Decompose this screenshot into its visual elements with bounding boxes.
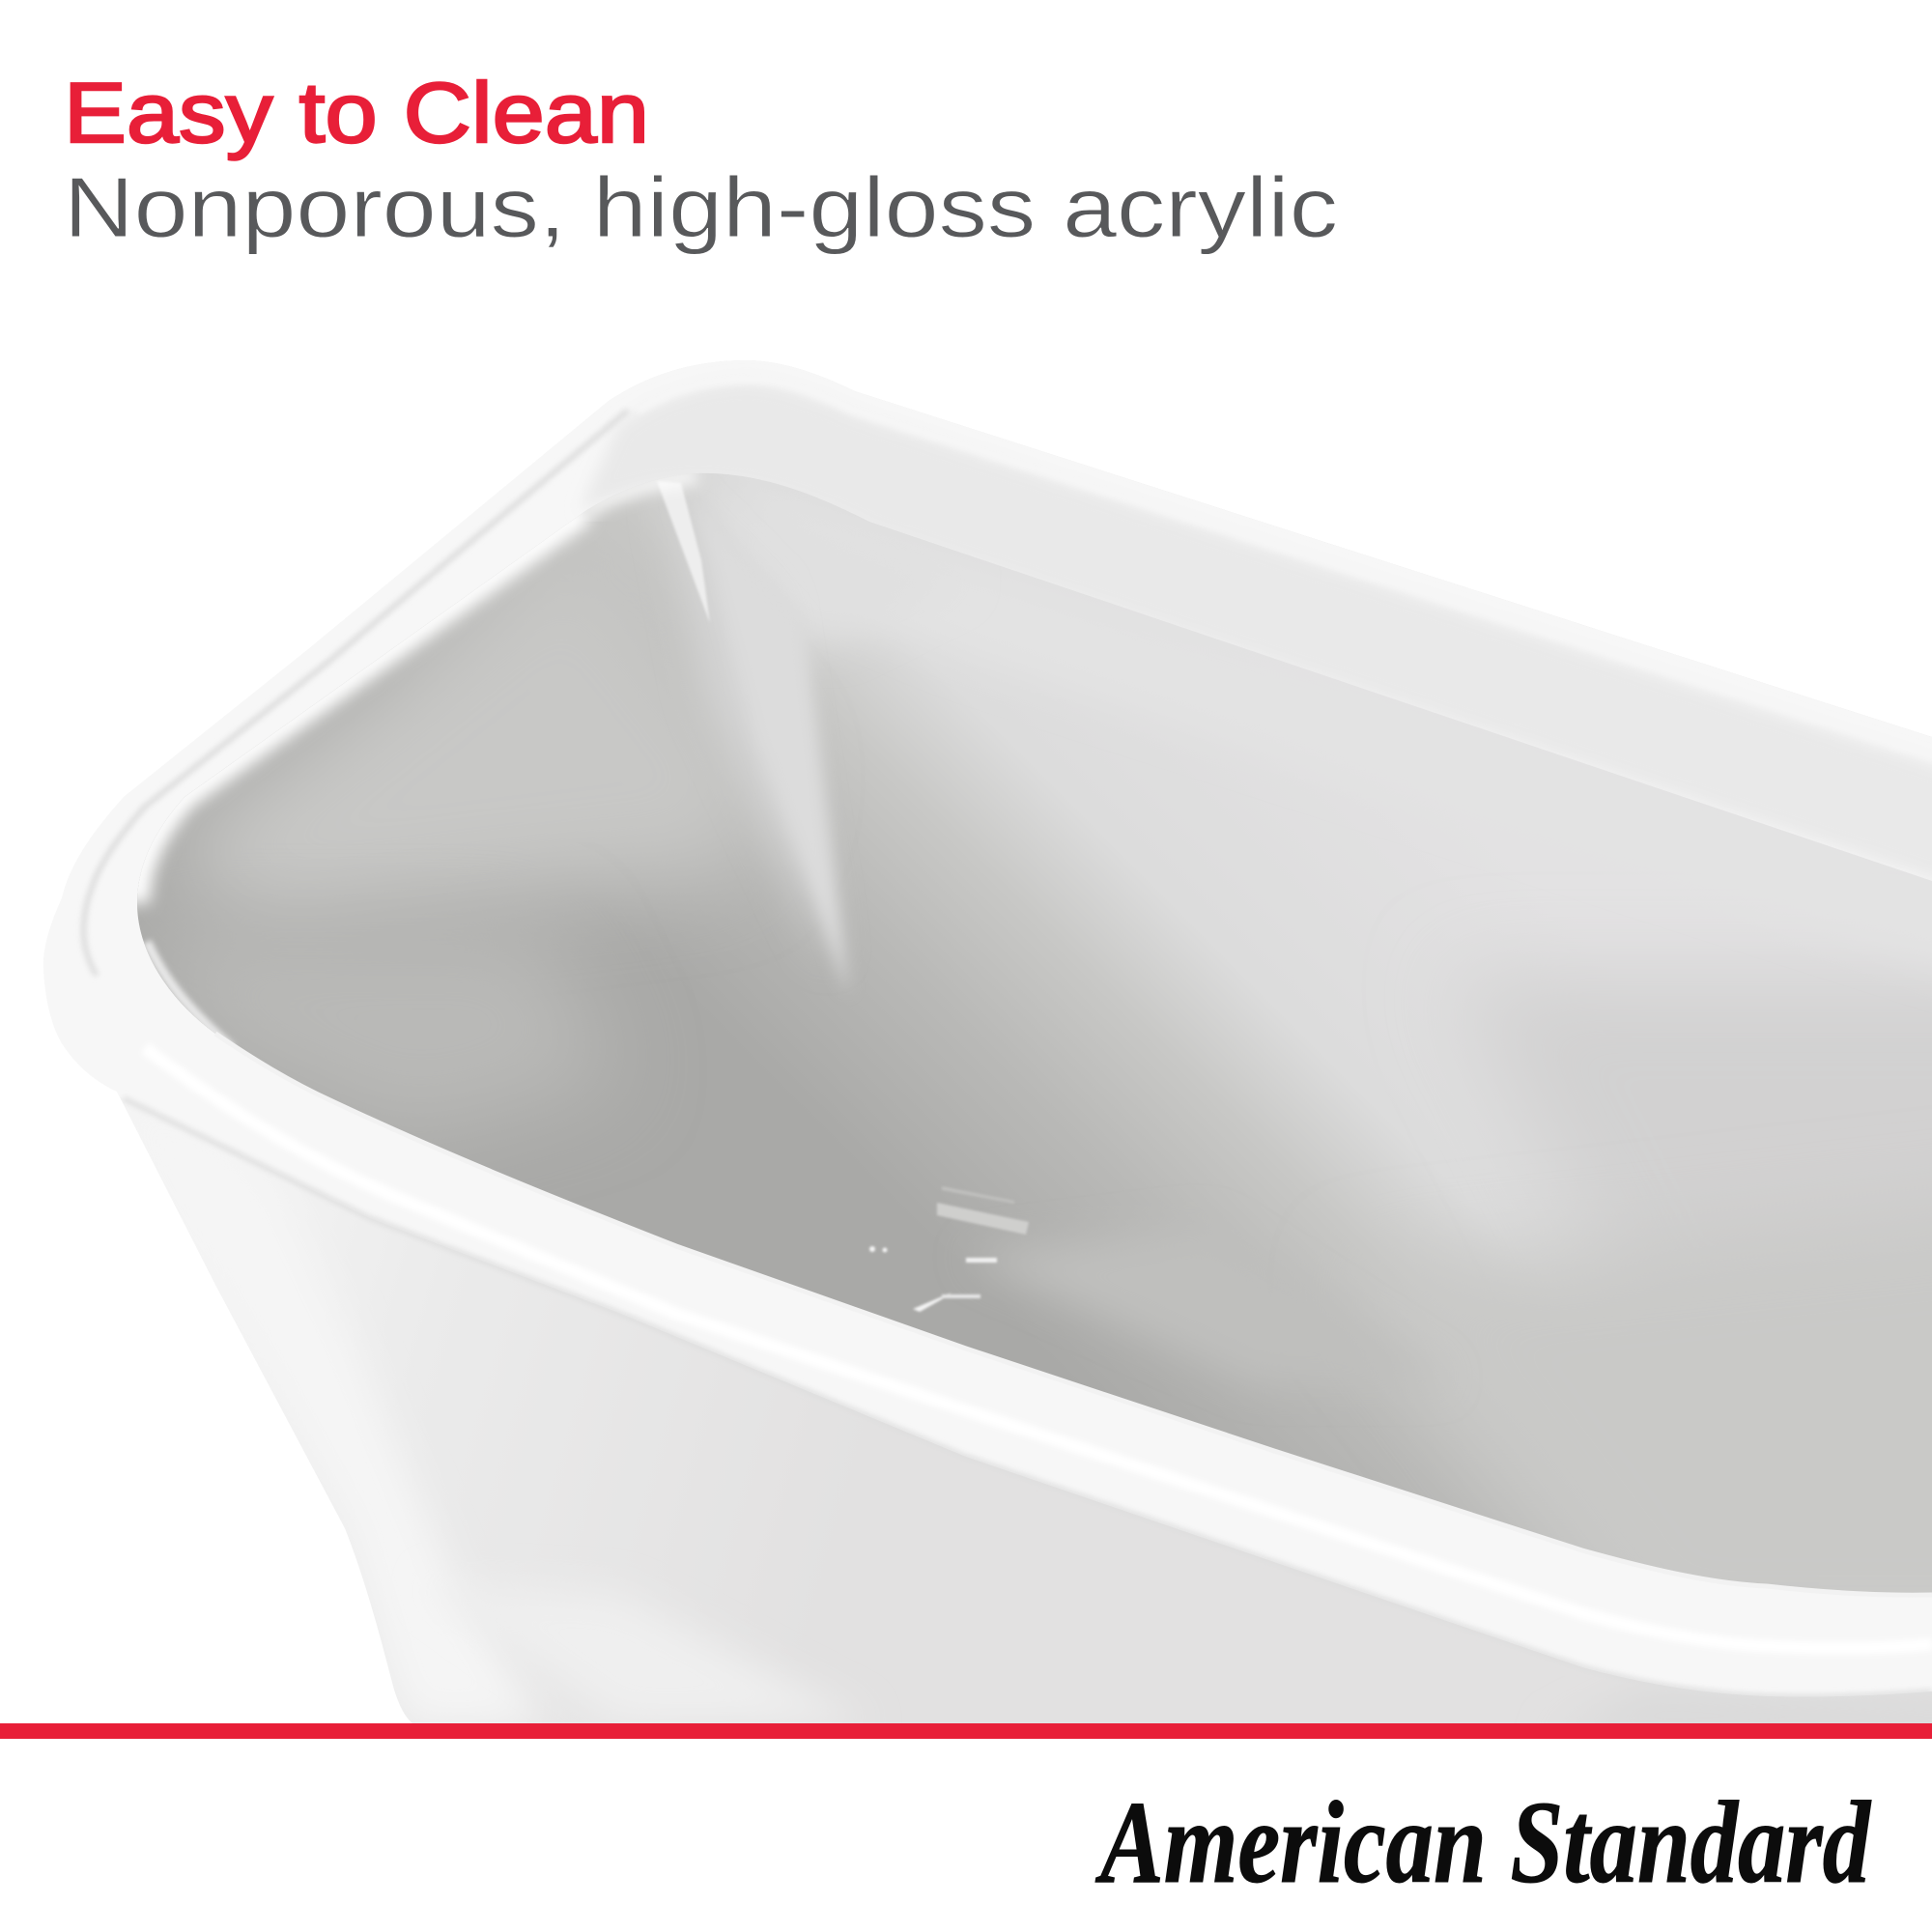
drain reflection [869,1186,1029,1312]
edge glow [137,511,585,903]
tub basin interior [97,454,1932,1662]
tub exterior body [0,348,1932,1739]
tub rim band [354,360,1932,1696]
bathtub illustration [0,348,1932,1739]
title: Easy to Clean [64,65,649,160]
near rim highlight [145,1048,1932,1648]
basin inner edge lip [215,1034,1932,1595]
far wall light [734,483,1932,995]
subtitle: Nonporous, high-gloss acrylic [64,159,1338,255]
red divider bar [0,1723,1932,1739]
right wall shade [1493,973,1932,1233]
bottom right shadow [1486,1244,1932,1593]
lower left tone [180,947,585,1128]
corner lip glow [147,942,232,1048]
left rim shadow line [83,411,628,976]
basin left wall tone [172,573,744,923]
light band on basin floor [1007,1247,1264,1360]
far rim shading [580,382,1932,898]
corner glow [722,510,838,641]
